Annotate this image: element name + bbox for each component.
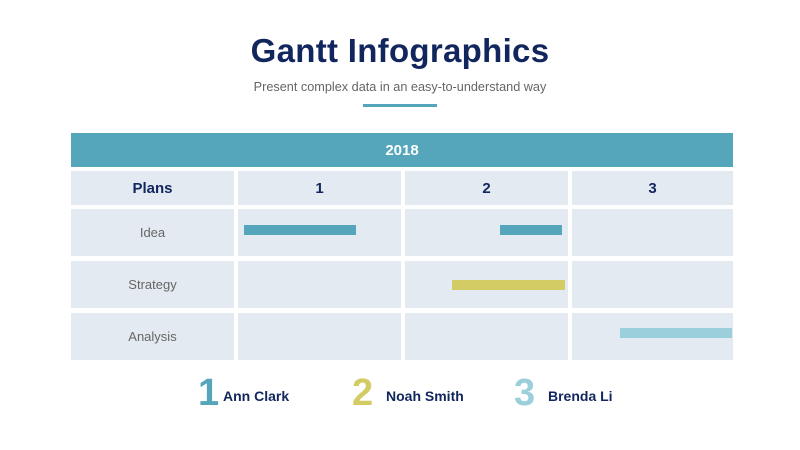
year header: 2018 — [385, 142, 419, 158]
header row: Plans — [132, 180, 173, 196]
panel: gantt table — [71, 133, 733, 360]
legend item 3 — [514, 372, 613, 414]
legend item 1: Ann Clark — [223, 388, 289, 404]
title: Gantt Infographics — [251, 32, 549, 69]
legend item 3: 3 — [514, 372, 535, 414]
row: Strategy — [71, 261, 733, 308]
header row: 3 — [648, 180, 657, 196]
header row: 1 — [315, 180, 324, 196]
legend item 1 — [198, 372, 290, 414]
bar: strategy — [452, 280, 565, 290]
underline accent — [363, 104, 437, 107]
row: Idea — [71, 209, 733, 256]
subtitle: Present complex data in an easy-to-understand way — [254, 80, 546, 94]
bar: idea 2 — [500, 225, 562, 235]
legend — [198, 372, 613, 414]
row: Idea: Idea — [140, 225, 165, 240]
year header — [71, 133, 733, 167]
row: Analysis — [71, 313, 733, 360]
row: Analysis: Analysis — [128, 329, 177, 344]
header row — [71, 171, 733, 205]
legend item 3: Brenda Li — [548, 388, 613, 404]
legend item 2: 2 — [352, 372, 373, 414]
row: Strategy: Strategy — [128, 277, 177, 292]
bar: analysis — [620, 328, 732, 338]
bar: idea 1 — [244, 225, 356, 235]
legend item 1: 1 — [198, 372, 219, 414]
legend item 2: Noah Smith — [386, 388, 464, 404]
legend item 2 — [352, 372, 464, 414]
header row: 2 — [482, 180, 491, 196]
